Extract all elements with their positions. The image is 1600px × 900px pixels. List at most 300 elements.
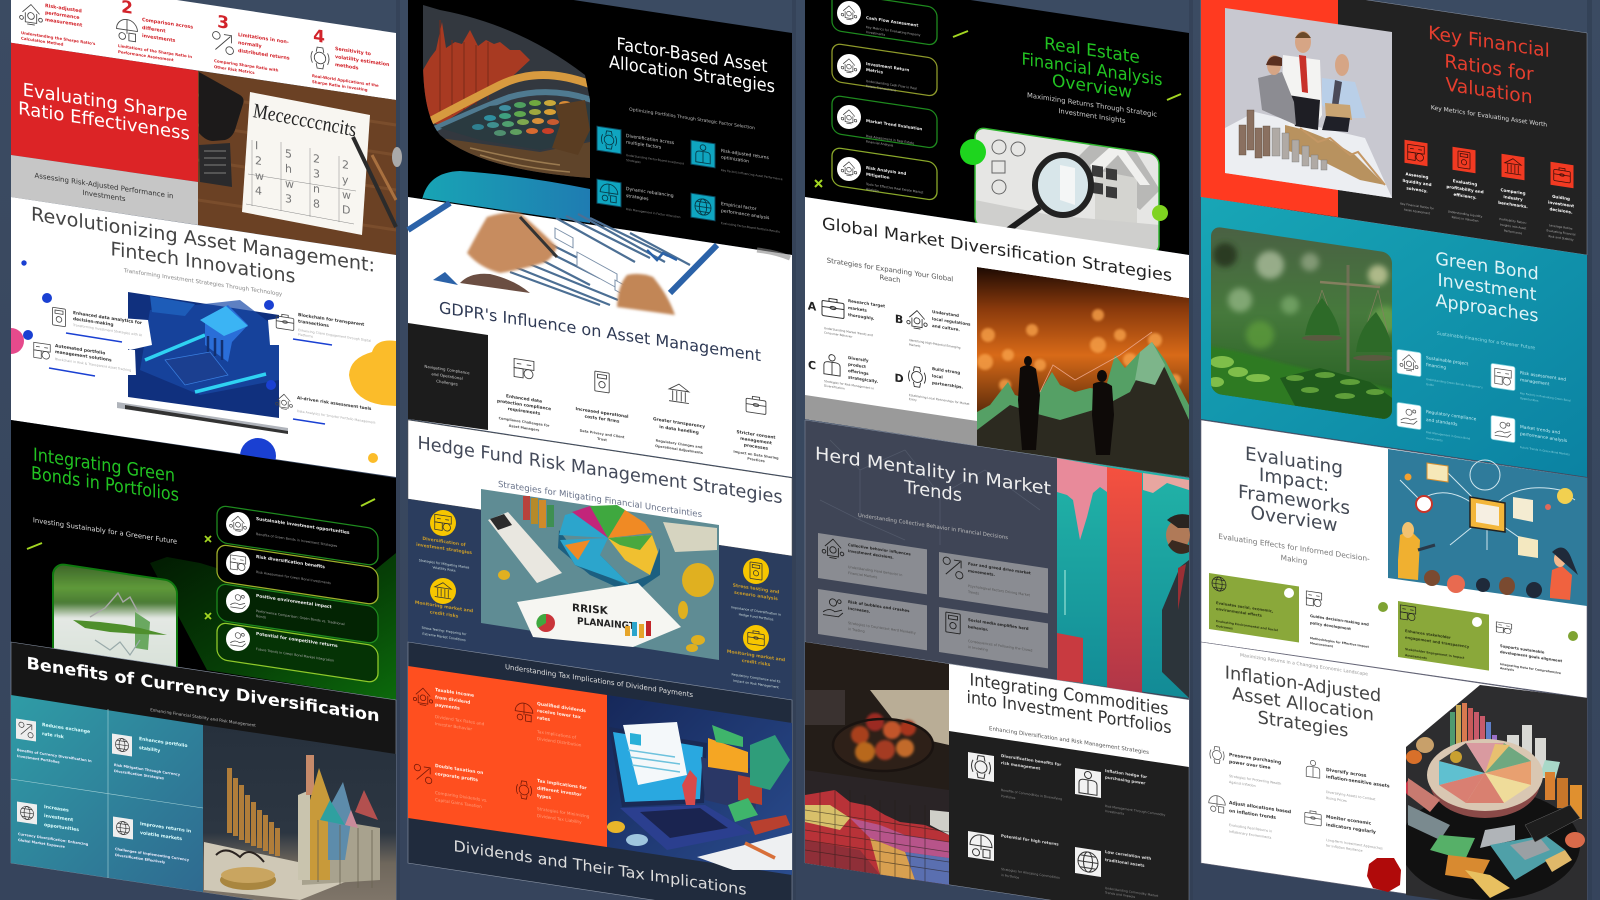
heading line two: Bonds in Portfolios	[31, 463, 179, 506]
item 4	[311, 26, 390, 94]
photo: desk with handwritten sheet: w	[255, 169, 264, 183]
item: risk-adjusted returns: Risk-adjusted returns	[721, 148, 769, 161]
card: bubbles and crashes	[818, 589, 927, 650]
item: potential for high returns: Strategies for Allocating Commodities	[1001, 867, 1060, 880]
panel: Global Market Diversification Strategies	[805, 197, 1189, 480]
item: stricter consent: management	[740, 436, 772, 446]
card: investment return metrics: Investment Return	[866, 61, 909, 72]
card: risk analysis and mitigation: Analysis	[866, 187, 879, 193]
heading line two: Investment	[1437, 271, 1537, 305]
item: monitoring left: credit risks	[430, 609, 459, 620]
item: dynamic rebalancing: Dynamic rebalancing	[626, 186, 674, 199]
item B: local regulations	[932, 316, 971, 327]
item: qualified dividends: rates	[537, 715, 550, 723]
item: inflation hedge: Inflation hedge for	[1105, 768, 1147, 779]
item: industry benchmarks: Comparing	[1500, 187, 1526, 196]
item: risk assessment: Opportunities	[1520, 396, 1539, 403]
card: positive environmental impact	[217, 583, 378, 644]
item: regulatory compliance: Investments	[1426, 436, 1443, 443]
item: risk assessment	[1491, 363, 1571, 408]
panel: Factor-Based Asset Allocation Strategies	[408, 0, 792, 255]
side box: Challenges	[436, 378, 458, 387]
card: decision-making and policy: policy development	[1310, 621, 1351, 631]
card: stakeholder engagement: Enhances stakeholder	[1405, 629, 1451, 640]
heading: Impact:	[1259, 465, 1329, 496]
item: industry benchmarks	[1498, 154, 1528, 236]
cell: reduces exchange rate risk	[16, 718, 92, 769]
item: increased operational costs: Data Privacy and Client	[580, 429, 625, 439]
heading: Global Market Diversification Strategies	[822, 214, 1172, 285]
item: AI-driven risk assessment: AI-driven risk assessment tools	[297, 395, 372, 411]
card: positive environmental impact: Performance Comparison: Green Bonds vs. Traditional	[256, 609, 345, 626]
item: monitor indicators: Long-Term Investment Approaches	[1326, 838, 1383, 851]
item 2: Limitations of the Sharpe Ratio in	[118, 43, 192, 59]
item: automated portfolio management: Automated portfolio	[55, 343, 105, 357]
card: potential for competitive returns	[217, 622, 378, 683]
subtitle: Maximizing Returns in a Changing Economic Landscape	[1240, 652, 1368, 678]
item 2: Comparison across	[142, 17, 193, 31]
photo: fruit bowl and colourful market table	[805, 640, 950, 890]
item: liquidity and solvency: Assessing	[1406, 171, 1429, 180]
card: investment return metrics: Understanding Cash Flow in Real	[866, 79, 917, 91]
card: risk diversification benefits	[217, 544, 378, 605]
item: diversification benefits: Diversification benefits for	[1001, 753, 1061, 767]
subtitle: Enhancing Financial Stability and Risk Management	[150, 707, 256, 728]
card: stakeholder engagement: Assessments	[1405, 653, 1427, 660]
item: monitor indicators: Monitor economic	[1326, 814, 1372, 827]
item: risk assessment: Risk assessment and	[1520, 370, 1566, 383]
image: risk planning desk with pie chart: PLANAINGT	[577, 616, 635, 632]
item: diversification: Strategies for Mitigating Market	[419, 558, 470, 570]
item: stress testing: Hedge Fund Portfolios	[739, 612, 774, 622]
cell: increases investment opportunities: Increases	[44, 804, 69, 814]
item: qualified dividends: Dividend Distribution	[537, 736, 582, 748]
item: potential for high returns	[968, 831, 1060, 886]
item: dynamic rebalancing: strategies	[626, 193, 649, 202]
item B: Identifying High-Potential Emerging	[909, 338, 961, 350]
item: AI-driven risk assessment: Data Analytics for Smarter Portfolio Management	[297, 409, 376, 425]
card: cash flow assessment: Investments	[866, 30, 886, 37]
panel: Green Bond Investment Approaches	[1201, 197, 1587, 477]
item: industry benchmarks: industry	[1503, 194, 1523, 202]
image: risk planning desk with pie chart: RRISK	[572, 602, 609, 617]
subtitle: Investments	[82, 188, 126, 203]
item: data protection compliance: Compliance Challenges for	[499, 416, 550, 428]
cell: enhances portfolio stability: Enhances portfolio	[139, 736, 187, 749]
item: inflation hedge	[1075, 768, 1166, 822]
item A: thoroughly.	[848, 312, 875, 321]
item: investment decisions: investment	[1548, 200, 1574, 208]
panel: Integrating Green Bonds in Portfolios	[11, 420, 396, 712]
item: taxable income: Investor Behavior	[435, 721, 472, 732]
item: industry benchmarks: benchmarks.	[1498, 200, 1528, 209]
card: market trend evaluation: Market Trend Evaluation	[866, 118, 922, 131]
heading line two: Trends	[903, 477, 962, 506]
heading: GDPR's Influence on Asset Management	[439, 298, 761, 365]
subtitle: Investing Sustainably for a Greener Future	[33, 516, 177, 546]
item: inflation hedge: Risk Management Through Commodity	[1105, 804, 1166, 817]
item C	[808, 353, 878, 395]
card: fear and greed: Trends	[967, 590, 979, 596]
item: adjust allocations: Inflationary Environments	[1229, 830, 1272, 840]
item: diversification: Diversification of	[422, 536, 466, 548]
card: sustainable development goals: development goals alignment	[1500, 650, 1562, 663]
heading: Integrating Green	[33, 444, 175, 487]
card: collective behavior: investment decisions.	[848, 549, 894, 560]
heading: Herd Mentality in Market	[815, 443, 1051, 500]
card: bubbles and crashes: Strategies to Counteract Herd Mentality	[848, 621, 916, 635]
card: social media: Consequences of Following the Crowd	[968, 639, 1032, 653]
item: increased operational costs: Increased operational	[576, 406, 629, 420]
photo: desk with handwritten sheet: 2	[255, 154, 262, 168]
item: market trends: performance analysis	[1520, 431, 1568, 444]
item: data protection compliance: requirements	[508, 406, 541, 417]
heading: Integrating Commodities	[970, 670, 1169, 720]
image: house with magnifying glass	[960, 128, 1168, 250]
item: AI-driven risk assessment	[266, 380, 376, 425]
item: adjust allocations: Adjust allocations based	[1229, 800, 1291, 815]
item: empirical factor performance: Evaluating Factor-Based Portfolio Results	[721, 221, 780, 234]
card: social media: Social media amplifies herd	[968, 617, 1029, 631]
cell: reduces exchange rate risk: Reduces exchange	[42, 722, 90, 735]
heading: Key Financial	[1428, 23, 1550, 62]
item: qualified dividends: Qualified dividends	[537, 701, 586, 714]
cell: improves returns in volatile markets: Challenges of Implementing Currency	[115, 847, 190, 862]
side box: and Operational	[431, 371, 463, 381]
item A: markets	[848, 305, 867, 313]
photo: green bond chart on lake	[52, 564, 178, 667]
item: enhanced data analytics: decision-making	[73, 316, 113, 328]
item: inflation hedge: purchasing power	[1105, 775, 1145, 786]
item D: Establishing Local Partnerships for Market	[909, 393, 970, 406]
photo: desk with handwritten sheet: I	[255, 139, 258, 152]
item 1: Understanding the Sharpe Ratio's	[21, 30, 96, 46]
image: man looking at market columns	[1057, 458, 1190, 698]
item: risk-adjusted returns: Key Factors Influencing Asset Performance	[721, 168, 783, 181]
item: enhanced data analytics: Transforming Investment Strategies with AI	[72, 323, 142, 337]
cell: increases investment opportunities: Global Market Exposure	[18, 838, 65, 849]
card: fear and greed: movements.	[968, 568, 995, 577]
item: liquidity and solvency: Asset Assessment	[1404, 208, 1431, 216]
card: market trend evaluation	[832, 95, 937, 151]
item: diversify across assets: Diversify across	[1326, 767, 1367, 779]
item: market trends	[1491, 415, 1570, 457]
cell: improves returns in volatile markets: Improves returns in	[140, 821, 191, 835]
item: diversification across factors: Understanding Factor-Based Investment	[626, 153, 685, 166]
heading: Hedge Fund Risk Management Strategies	[418, 433, 782, 508]
panel: Real Estate Financial Analysis Overview	[805, 0, 1189, 260]
panel: Integrating Commodities into Investment Portfolios	[805, 640, 1189, 900]
item: liquidity and solvency: Key Financial Ratios for	[1400, 201, 1435, 211]
cell: enhances portfolio stability: Diversification Strategies	[114, 769, 164, 780]
item: inflation hedge: Investments	[1105, 809, 1125, 816]
item: taxable income: Dividend Tax Rates and	[435, 714, 485, 726]
item: potential for high returns: Potential for high returns	[1001, 833, 1059, 847]
item: taxable income: Taxable income	[435, 687, 474, 699]
cell: increases investment opportunities: Currency Diversification: Enhancing	[18, 832, 89, 847]
item: diversification	[416, 510, 472, 575]
item 3: Limitations in non-	[238, 32, 289, 46]
item: monitoring left: Monitoring market and	[415, 600, 473, 614]
heading: Frameworks	[1238, 482, 1350, 519]
item C: Diversification	[824, 384, 845, 391]
item 3: distributed returns	[238, 48, 290, 62]
card: sustainable development goals	[1496, 622, 1578, 679]
image: risk planning desk with pie chart	[481, 489, 719, 660]
item: sustainable project financing: Sustainable project	[1426, 355, 1468, 367]
item: diversification benefits: Benefits of Commodities in Diversifying	[1001, 788, 1062, 801]
card: risk diversification benefits: Risk Assessment for Green Bond Investments	[256, 570, 331, 585]
item: low correlation: traditional assets	[1105, 857, 1145, 868]
photo: desk with handwritten sheet: 5	[285, 147, 292, 161]
card: investment return metrics: Metrics	[866, 67, 884, 75]
item: different investor types: different investor	[537, 786, 582, 798]
item: regulatory compliance	[1397, 402, 1477, 447]
item: risk-adjusted returns: optimization	[721, 155, 749, 165]
subtitle: Understanding Collective Behavior in Financial Decisions	[858, 513, 1008, 541]
item A: Research target	[848, 298, 885, 309]
card: collective behavior: Understanding Herd Behavior in	[848, 565, 902, 577]
item 2: investments	[142, 33, 175, 44]
item: low correlation	[1075, 847, 1159, 900]
item: enhanced data analytics	[42, 293, 143, 342]
item 4: Sensitivity to	[335, 46, 372, 57]
card: fear and greed: Fear and greed drive market	[968, 561, 1031, 575]
card: decision-making and policy: Methodologies for Effective Impact	[1310, 636, 1370, 649]
item: diversification across factors: Diversification across	[626, 133, 675, 146]
item: increased operational costs: Trust	[597, 437, 607, 442]
item: diversify across assets: Diversifying Assets to Combat	[1326, 790, 1376, 802]
photo: desk with handwritten sheet: w	[285, 177, 294, 191]
card: investment return metrics	[832, 43, 937, 97]
item: investment decisions	[1547, 162, 1576, 242]
item: investment decisions: Evaluating Financial	[1547, 228, 1576, 237]
card: risk analysis and mitigation: Risk Analysis and	[866, 165, 906, 176]
illustration: people and connected data network	[1388, 449, 1587, 606]
item: monitoring right	[727, 625, 785, 690]
image: market landscape leaf shape	[420, 0, 595, 180]
subtitle: Assessing Risk-Adjusted Performance in	[35, 171, 173, 200]
item: diversification benefits: Portfolios	[1001, 794, 1016, 800]
card: bubbles and crashes: Risk of bubbles and crashes	[848, 599, 910, 613]
item: investment decisions: decisions.	[1549, 206, 1573, 215]
item: profitability and efficiency: Understanding Liquidity	[1448, 209, 1483, 219]
panel: Evaluating Sharpe Ratio Effectiveness	[11, 0, 402, 255]
subtitle: Making	[1281, 553, 1308, 566]
item: market trends: Market trends and	[1520, 424, 1560, 436]
card: cash flow assessment	[832, 0, 937, 46]
item: monitor indicators: indicators regularly	[1326, 822, 1376, 835]
image: 3D pie chart, bars and calculators	[1400, 680, 1590, 900]
item: diversify across assets	[1306, 759, 1390, 808]
item: qualified dividends	[515, 701, 586, 748]
photo: desk with handwritten sheet: 3	[285, 192, 292, 206]
item: diversification: investment strategies	[416, 542, 472, 556]
item A: Consumer Behavior	[824, 331, 853, 339]
item 1	[20, 3, 96, 52]
illustration: isometric bank on laptop	[117, 292, 288, 434]
item: blockchain: Blockchain for transparent	[298, 312, 364, 328]
heading: Strategies	[1258, 707, 1348, 742]
item: data protection compliance	[497, 359, 551, 434]
item: stricter consent: Stricter consent	[737, 429, 775, 441]
item: taxable income: from dividend	[435, 695, 470, 706]
card: bubbles and crashes: increases.	[848, 606, 871, 614]
cell: reduces exchange rate risk: Investment Portfolios	[17, 754, 60, 764]
panel: Dividends and Their Tax Implications	[408, 642, 792, 900]
heading: Overview	[1250, 503, 1338, 537]
card: decision-making and policy: Measurement	[1310, 641, 1334, 649]
item: monitoring left: Stress Testing: Preparing for	[422, 626, 467, 636]
heading: Evaluating	[1245, 444, 1343, 479]
item A: Understanding Market Trends and	[824, 326, 873, 337]
card: risk diversification benefits: Risk diversification benefits	[256, 554, 325, 570]
item: profitability and efficiency: profitability and	[1446, 184, 1484, 194]
item: qualified dividends: Tax Implications of	[536, 729, 577, 740]
card: positive environmental impact: Positive environmental impact	[256, 593, 332, 610]
item: low correlation: Trends and Impacts	[1104, 890, 1136, 899]
cell: improves returns in volatile markets: volatile markets	[140, 830, 182, 842]
card: cash flow assessment: Key Metrics for Evaluating Property	[866, 25, 921, 37]
heading line three: Valuation	[1445, 75, 1533, 109]
item: diversification: Volatility Risks	[432, 565, 456, 573]
item B	[895, 309, 971, 354]
item 3: Comparing Sharpe Ratio with	[214, 58, 279, 73]
item: adjust allocations: Evaluating Real Returns in	[1229, 823, 1272, 833]
item: profitability and efficiency: efficiency.	[1453, 192, 1477, 200]
photo: desk with handwritten sheet: 2	[342, 158, 349, 172]
item: double taxation: Double taxation on	[435, 763, 483, 776]
item: dynamic rebalancing: Risk Management in Factor Allocation	[626, 207, 681, 219]
item D: D	[894, 371, 904, 386]
cell: increases investment opportunities: investment	[44, 813, 74, 823]
subtitle: Transforming Investment Strategies Through Technology	[123, 268, 283, 298]
item: profitability and efficiency: Evaluating	[1453, 178, 1477, 187]
item D: local	[932, 373, 943, 380]
item 1: Risk-adjusted	[45, 3, 82, 15]
item: adjust allocations	[1209, 795, 1291, 840]
item: diversification benefits: risk management	[1001, 760, 1040, 771]
photo: desk with handwritten sheet: n	[313, 182, 320, 196]
card: sustainable investment opportunities: Benefits of Green Bonds in Investment Strategies	[256, 532, 337, 548]
subtitle: Optimizing Portfolios Through Strategic Factor Selection	[629, 107, 755, 131]
item: automated portfolio management: management solutions	[55, 349, 112, 364]
item: stricter consent: processes	[744, 442, 768, 452]
item: monitoring left	[415, 578, 473, 642]
item: monitoring right: Monitoring market and	[727, 649, 785, 663]
item 3: normally	[238, 40, 263, 50]
card: collective behavior: Collective behavior influences	[848, 543, 911, 557]
item: monitor indicators	[1305, 810, 1383, 856]
cell: increases investment opportunities: opportunities	[44, 822, 79, 833]
item: different investor types	[516, 778, 590, 826]
item: greater transparency: in data handling	[659, 424, 699, 436]
item D: Build strong	[932, 366, 960, 375]
item: diversification across factors: Strategies	[626, 158, 641, 164]
item: data protection compliance: Asset Managers	[509, 424, 539, 432]
card: market trend evaluation: Financial Analysis	[866, 140, 894, 148]
item: double taxation: corporate profits	[435, 771, 478, 783]
card: potential for competitive returns: Potential for competitive returns	[256, 631, 338, 649]
item: stress testing	[731, 558, 781, 623]
item: empirical factor performance: performance analysis	[721, 208, 770, 221]
card: risk analysis and mitigation: Tools for Effective Real Estate Market	[865, 182, 924, 195]
heading line three: Overview	[1052, 71, 1132, 103]
panel: Herd Mentality in Market Trends	[805, 420, 1190, 700]
item: blockchain: transactions	[298, 319, 329, 329]
panel: GDPR's Influence on Asset Management	[408, 197, 792, 477]
item: qualified dividends: receive lower tax	[537, 708, 581, 721]
item: increased operational costs: costs for firms	[585, 414, 620, 425]
card: sustainable investment opportunities	[217, 505, 378, 566]
item: regulatory compliance: Regulatory compliance	[1426, 409, 1477, 423]
card: stakeholder engagement	[1398, 601, 1489, 671]
item A: A	[808, 299, 817, 314]
item: different investor types: Dividend Tax Liability	[537, 813, 582, 825]
item 2	[117, 0, 193, 65]
item B: Markets	[909, 343, 921, 348]
decorative octagon	[1367, 858, 1401, 892]
photo: desk with handwritten sheet: 3	[313, 167, 320, 181]
subtitle: Strategies for Expanding Your Global	[827, 257, 953, 283]
item: different investor types: Tax implications for	[537, 778, 587, 792]
item: preserve purchasing power: power over time	[1229, 759, 1271, 771]
item: preserve purchasing power: Preserve purchasing	[1229, 752, 1281, 766]
item D	[894, 366, 970, 410]
item: taxable income	[413, 687, 485, 733]
item 1: Calculation Method	[21, 36, 64, 47]
subtitle: Evaluating Effects for Informed Decision-	[1218, 532, 1370, 563]
item: greater transparency: Operational Adjustments	[655, 444, 703, 455]
heading line two: Ratio Effectiveness	[18, 98, 190, 145]
card: decision-making and policy	[1306, 591, 1388, 654]
item: industry benchmarks: Insights into Asset	[1500, 223, 1527, 231]
item: stress testing: Stress testing and	[733, 583, 779, 595]
cell: increases investment opportunities	[17, 802, 89, 853]
card: fear and greed	[939, 552, 1048, 613]
item: investment decisions: Risk and Stability	[1548, 234, 1574, 242]
item: stress testing: Importance of Diversification in	[731, 605, 781, 617]
item: liquidity and solvency: liquidity and	[1402, 178, 1432, 187]
item: monitoring left: Extreme Market Conditions	[422, 632, 466, 642]
card: social economic effects: environmental effects	[1216, 607, 1263, 618]
cell: enhances portfolio stability: stability	[139, 745, 160, 754]
item: stricter consent	[733, 395, 779, 465]
item: sustainable project financing: financing	[1426, 362, 1446, 371]
item: preserve purchasing power	[1210, 746, 1281, 792]
item: blockchain: Enhancing Client Engagement through Digital	[298, 328, 371, 343]
item: sustainable project financing	[1397, 349, 1483, 395]
item B: and culture.	[932, 323, 960, 332]
heading: Benefits of Currency Diversification	[26, 654, 380, 725]
item 3	[213, 12, 290, 79]
card: stakeholder engagement: engagement and transparency	[1405, 636, 1470, 649]
heading: Evaluating Sharpe	[23, 80, 187, 125]
heading: Revolutionizing Asset Management:	[31, 202, 375, 277]
item: data protection compliance: Enhanced data	[506, 393, 542, 405]
cell: reduces exchange rate risk: rate risk	[42, 731, 65, 740]
card: social economic effects: Evaluating Environmental and Social	[1216, 619, 1278, 632]
card: social economic effects: Evaluates social, economic,	[1216, 601, 1274, 614]
item C: Diversify	[848, 355, 869, 363]
item: preserve purchasing power: Against Inflation	[1229, 780, 1256, 788]
panel: Key Financial Ratios for Valuation	[1201, 0, 1587, 255]
item: diversification across factors: multiple factors	[626, 140, 662, 151]
item: industry benchmarks: Performance	[1504, 229, 1522, 235]
card: fear and greed: Psychological Factors Driving Market	[968, 584, 1031, 597]
item: greater transparency: Regulatory Changes and	[656, 439, 703, 450]
photo: desk with handwritten sheet: w	[342, 188, 351, 202]
